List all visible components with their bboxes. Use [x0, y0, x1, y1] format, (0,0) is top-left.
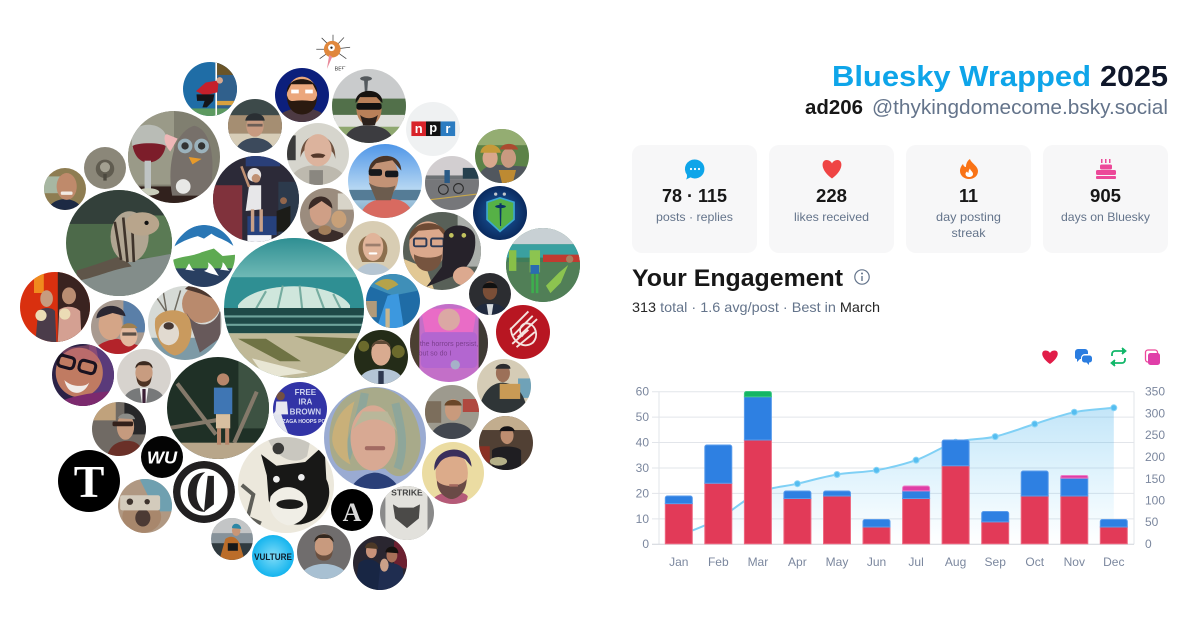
avatar: The Athletic A logo: A — [343, 498, 362, 527]
panel: posts and replies stat: 78 · 115 — [662, 186, 727, 206]
avatar: two basketball players — [353, 536, 407, 590]
avatar: pink meme — [410, 304, 488, 382]
panel: posting streak stat: day posting — [936, 210, 1001, 224]
avatar: Strike poster — [380, 486, 434, 540]
left axis labels: 60 — [636, 384, 649, 398]
right axis labels: 300 — [1145, 406, 1165, 420]
avatar: mountain water logo — [173, 225, 235, 287]
avatar: blue artwork — [366, 274, 420, 328]
avatar: furby with wine glass — [128, 111, 220, 203]
avatar: man with glasses purple tint — [52, 344, 114, 406]
avatar: man at restaurant — [479, 416, 533, 470]
right axis labels: 0 — [1145, 537, 1152, 551]
avatar: pink meme: but so do I — [419, 350, 451, 357]
month labels: Nov — [1064, 555, 1085, 569]
avatar: smiling man — [44, 168, 86, 210]
avatar: man with glasses, sunset street — [92, 402, 146, 456]
icon: speech bubble — [685, 159, 704, 180]
right axis labels — [1145, 384, 1165, 551]
avatar: New York Times logo: T — [74, 456, 104, 507]
panel: posts and replies stat: posts · replies — [656, 210, 733, 224]
legend: engagement types — [1042, 348, 1160, 366]
right axis labels: 200 — [1145, 450, 1165, 464]
avatar: The Athletic A logo — [331, 489, 373, 531]
cumulative area and line — [679, 405, 1117, 544]
avatar: cartoon bearded man — [275, 68, 329, 122]
month labels: Jan — [669, 555, 688, 569]
avatar: chipmunk on rock — [66, 190, 172, 296]
avatar: hiker with blue cap — [211, 518, 253, 560]
avatar: Sounders crest — [473, 186, 527, 240]
avatar: man on gray backdrop — [297, 525, 351, 579]
left axis labels: 50 — [636, 410, 649, 424]
icon: reposts legend arrows — [1112, 348, 1126, 366]
avatar: Siamese cat with box — [118, 479, 172, 533]
avatar: Oregonian O logo — [173, 461, 235, 523]
avatar: Free Ira Brown podcast: BROWN — [290, 407, 321, 416]
avatar: Portland Trail Blazers logo — [496, 305, 550, 359]
avatar: mustache man — [287, 123, 349, 185]
avatar: basketball player jumping — [213, 156, 299, 242]
avatar: NPR logo: p — [429, 120, 437, 135]
panel: posting streak stat — [906, 145, 1031, 253]
avatar: Kingdome stadium — [224, 238, 364, 378]
left axis labels: 40 — [636, 436, 649, 450]
avatar: man in suit — [117, 349, 171, 403]
icon: flame — [960, 159, 978, 179]
avatar: man in dark suit — [469, 273, 511, 315]
avatar: cartoon character — [316, 34, 350, 70]
panel: likes received stat: 228 — [816, 186, 847, 206]
month labels: Dec — [1103, 555, 1124, 569]
left axis labels: 0 — [642, 537, 649, 551]
panel: posts and replies stat — [632, 145, 757, 253]
avatar: Vulture logo: VULTURE — [254, 552, 292, 562]
icon: heart — [823, 160, 841, 178]
avatar: Vulture logo — [252, 535, 294, 577]
right axis labels: 250 — [1145, 428, 1165, 442]
avatar: pink meme: the horrors persist, — [420, 341, 478, 348]
month labels: Feb — [708, 555, 729, 569]
month labels: Jul — [908, 555, 924, 569]
avatar: NPR logo: n — [415, 121, 423, 136]
avatar: bearded man with black cat — [403, 212, 481, 290]
avatar: WU logo — [141, 436, 183, 478]
right axis labels: 150 — [1145, 472, 1165, 486]
avatar: Free Ira Brown podcast: FREE — [295, 388, 317, 397]
month labels: Sep — [985, 555, 1006, 569]
panel: posting streak stat: 11 — [959, 186, 978, 206]
avatar: man standing in forest — [167, 357, 269, 459]
icon: likes legend heart — [1042, 350, 1058, 364]
avatar: man holding cardboard box — [477, 359, 531, 413]
avatar: man with sunglasses and Space Needle — [332, 69, 406, 143]
bars: reposts — [744, 392, 771, 397]
left axis labels: 10 — [636, 512, 649, 526]
avatar: New York Times logo — [58, 450, 120, 512]
avatar: man with tie — [354, 330, 408, 384]
avatar: running player — [183, 62, 237, 116]
bars: quotes — [903, 476, 1088, 491]
user handle line: @thykingdomecome.bsky.social — [872, 97, 1168, 119]
engagement summary text: 313 total · 1.6 avg/post · Best in March — [632, 299, 880, 315]
user handle line: ad206 — [805, 97, 863, 119]
avatar: Strike poster: STRIKE — [391, 488, 423, 498]
chart: monthly engagement stacked bars with cumulative line — [636, 384, 1165, 569]
left axis labels — [636, 384, 649, 551]
month labels: Jun — [867, 555, 886, 569]
month labels: May — [826, 555, 848, 569]
avatar: cyclist on street — [425, 156, 479, 210]
avatar: man in sunglasses at beach — [348, 144, 422, 218]
month labels — [669, 555, 1124, 569]
avatar: WU logo: WU — [147, 447, 178, 467]
bars: replies — [665, 397, 1127, 527]
avatar: man in grey t-shirt at market — [425, 385, 479, 439]
avatar: man with yellow dog — [148, 284, 222, 360]
panel: avatar bubble cluster — [20, 34, 580, 590]
title: Bluesky Wrapped — [832, 61, 1091, 93]
left axis labels: 30 — [636, 461, 649, 475]
avatar: NPR logo: r — [445, 121, 450, 136]
month labels: Oct — [1025, 555, 1045, 569]
panel: posting streak stat: streak — [952, 226, 987, 240]
avatar: NPR logo — [406, 102, 460, 156]
panel: days on Bluesky stat: days on Bluesky — [1061, 210, 1150, 224]
left axis labels: 20 — [636, 486, 649, 500]
avatar: Free Ira Brown podcast — [271, 382, 330, 436]
avatar: lion door knocker — [84, 147, 126, 189]
icon: replies legend bubbles — [1075, 349, 1092, 365]
avatar: mom and child selfie — [91, 300, 145, 354]
avatar: black and white cat — [238, 437, 334, 533]
heading: Your Engagement: Your Engagement — [632, 265, 843, 292]
avatar: soccer players on field — [506, 228, 580, 302]
avatar: man with beard on yellow — [422, 442, 484, 504]
avatar: couple in hats among trees — [475, 129, 529, 183]
avatar: woman with child selfie — [300, 188, 354, 242]
bars: likes — [665, 440, 1127, 544]
avatar: two men with trophies on red — [20, 272, 90, 342]
avatar: Free Ira Brown podcast: GONZAGA HOOPS POD — [271, 419, 330, 425]
month labels: Mar — [748, 555, 768, 569]
title: 2025 — [1100, 61, 1168, 93]
month labels: Apr — [788, 555, 807, 569]
icon: info — [855, 270, 869, 284]
right axis labels: 100 — [1145, 494, 1165, 508]
right axis labels: 50 — [1145, 515, 1159, 529]
panel: likes received stat: likes received — [794, 210, 869, 224]
avatar: cartoon character: BEEP! — [335, 66, 350, 72]
avatar: man in cap at stadium — [228, 99, 282, 153]
avatar: blonde woman — [324, 387, 426, 489]
panel: days on Bluesky stat: 905 — [1090, 186, 1121, 206]
icon: birthday cake — [1096, 159, 1116, 179]
avatar: Free Ira Brown podcast: IRA — [298, 398, 313, 407]
month labels: Aug — [945, 555, 966, 569]
right axis labels: 350 — [1145, 384, 1165, 398]
avatar: smiling older woman — [346, 221, 400, 275]
icon: quotes legend squares — [1146, 350, 1160, 365]
panel: likes received stat — [769, 145, 894, 253]
panel: days on Bluesky stat — [1043, 145, 1168, 253]
